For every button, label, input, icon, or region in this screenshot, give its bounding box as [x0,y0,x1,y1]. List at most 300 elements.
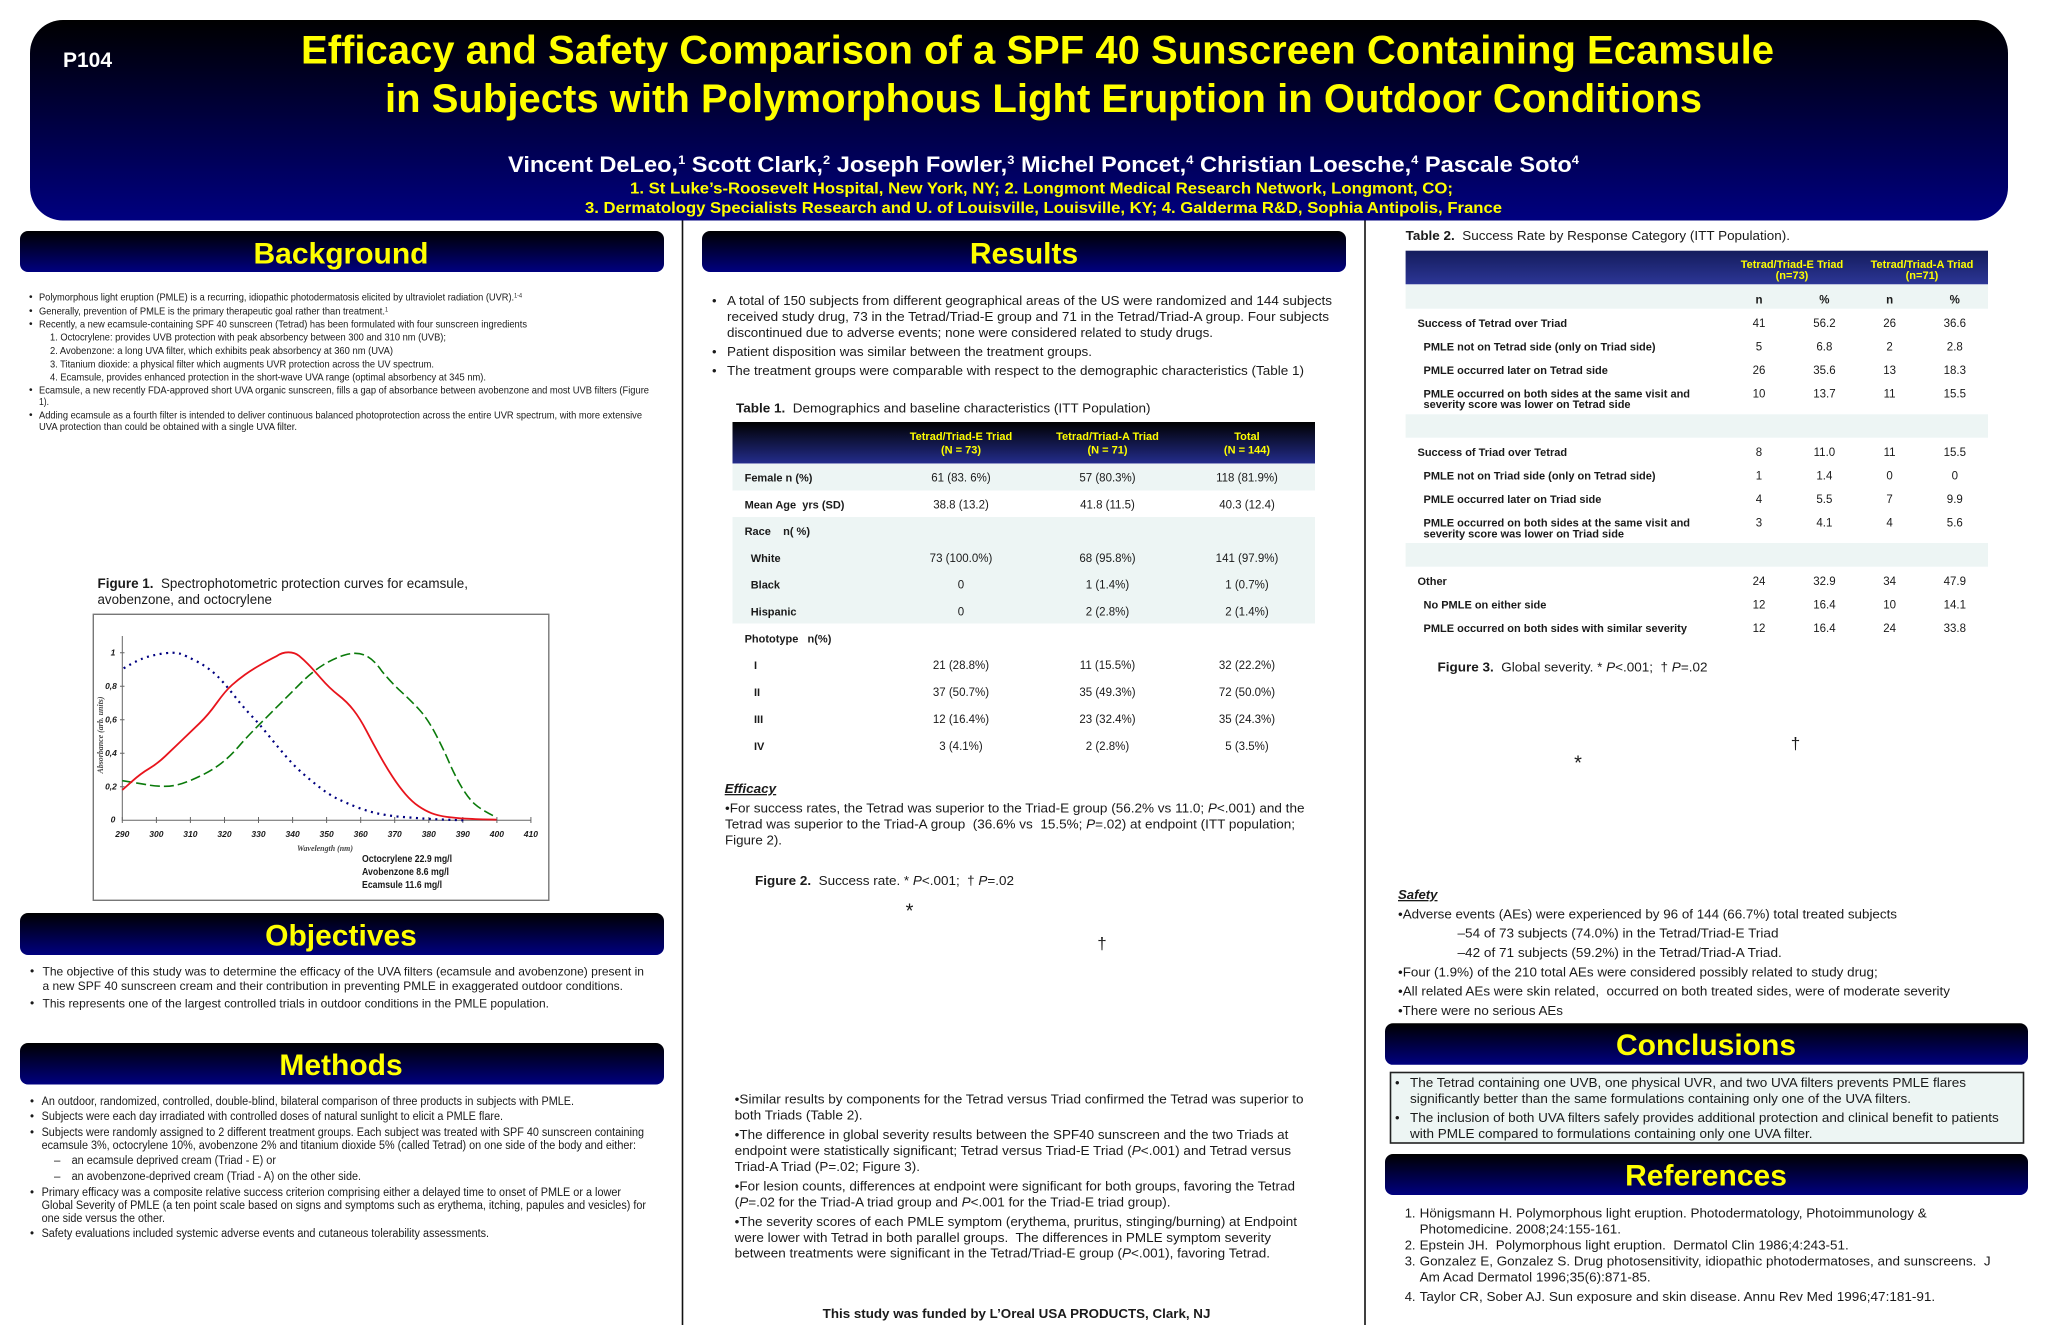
authors: Michel Poncet, [1014,152,1186,177]
title banner [30,20,2008,220]
table 1 header: (N = 71) [1087,444,1128,456]
row: success of triad over tetrad [1418,447,1966,459]
row: phototype III: 23 (32.4%) [1079,714,1136,726]
methods text: – [54,1155,61,1167]
row: similar severity: PMLE occurred on both sides with similar severity [1424,623,1688,635]
efficacy text: Tetrad was superior to the Triad-A group (36.6% vs 15.5%; P=.02) at endpoint (ITT population; [725,816,1295,832]
background text: 1). [39,397,49,408]
background text: 4. Ecamsule, provides enhanced protection in the short-wave UVA range (optimal absorbency at 345 nm). [50,372,486,384]
row: PMLE not on Tetrad side: 2.8 [1947,342,1963,354]
poster number: P104 [63,49,112,72]
methods text: – [54,1171,61,1183]
row band: n and % [1406,285,1988,309]
row: black: Black [751,580,781,592]
chart legend: Ecamsule 11.6 mg/l [362,879,442,891]
row: PMLE both sides, lower on Tetrad: PMLE occurred on both sides at the same visit and [1424,388,1690,400]
panel: results [702,231,1346,1321]
row: black [751,580,1269,592]
row: phototype IV: 5 (3.5%) [1225,741,1269,753]
authors: 2 [823,153,830,167]
row: column units: % [1950,294,1960,306]
row: no PMLE: 12 [1753,600,1765,612]
figure 3 caption: Figure 3. Global severity. * P<.001; † P=.02 [1438,660,1708,674]
figure 2 significance marker: dagger: † [1097,934,1107,953]
conclusions box: The inclusion of both UVA filters safely provides additional protection and clinical benefit to patients [1410,1110,1999,1125]
row: PMLE not on Triad side: PMLE not on Triad side (only on Tetrad side) [1424,470,1656,482]
reference list: 3. [1405,1254,1416,1268]
row: PMLE not on Tetrad side: 6.8 [1816,342,1832,354]
row: phototype III: 35 (24.3%) [1219,714,1275,726]
safety text: •Adverse events (AEs) were experienced by 96 of 144 (66.7%) total treated subjects [1398,906,1898,922]
row: black: 1 (1.4%) [1086,580,1129,592]
heading: background: Background [253,238,429,270]
background text: Recently, a new ecamsule-containing SPF 40 sunscreen (Tetrad) has been formulated with four sunscreen ingredients [39,320,527,330]
row: other: 32.9 [1813,576,1836,588]
authors: Scott Clark, [685,152,823,177]
reference list: Am Acad Dermatol 1996;35(6):871-85. [1420,1270,1651,1284]
background text: 1 [385,308,389,314]
figure 3 significance marker: dagger: † [1791,734,1800,753]
background text: • [29,292,33,303]
safety text [1398,887,1951,1018]
conclusions box [1390,1072,2024,1143]
row: PMLE later on Tetrad side: PMLE occurred later on Tetrad side [1424,365,1608,377]
row: success of tetrad over triad: 41 [1753,318,1765,330]
row: success of tetrad over triad: Success of Tetrad over Triad [1418,318,1567,330]
reference list: Gonzalez E, Gonzalez S. Drug photosensitivity, idiopathic photodermatoses, and sunscreens. J [1420,1254,1991,1268]
table 1 header [732,422,1315,464]
objectives text: This represents one of the largest controlled trials in outdoor conditions in the PMLE population. [42,996,549,1010]
row: PMLE both sides, lower on Triad [1424,518,1963,540]
x axis labels: 410 [523,829,538,839]
background text: 3. Titanium dioxide: a physical filter which augments UVR protection across the UV spectrum. [50,360,434,370]
results body text: •The severity scores of each PMLE symptom (erythema, pruritus, stinging/burning) at Endpoint [735,1214,1297,1229]
row: mean age: Mean Age yrs (SD) [745,500,845,512]
affiliations: 3. Dermatology Specialists Research and U. of Louisville, Louisville, KY; 4. Galderma R&D, Sophia Antipolis, France [585,200,1502,217]
row: PMLE later on Triad side: PMLE occurred later on Triad side [1424,494,1601,506]
banner background [30,20,2008,220]
row: phototype IV: IV [754,741,765,753]
row: no PMLE: 16.4 [1813,600,1836,612]
row: mean age: 40.3 (12.4) [1219,500,1275,512]
reference list: 4. [1405,1289,1416,1304]
background text: • [29,306,33,317]
row: success of tetrad over triad: 36.6 [1944,318,1966,330]
row: PMLE later on Triad side: 7 [1886,494,1893,506]
figure 1 line chart [93,614,549,900]
row: PMLE later on Tetrad side [1424,365,1966,377]
row: PMLE both sides, lower on Tetrad [1424,388,1966,411]
background text: Ecamsule, a new recently FDA-approved short UVA organic sunscreen, fills a gap of absorbance between avobenzone and most UVB filters (Figure [39,386,649,396]
row: PMLE both sides, lower on Triad: 4 [1886,518,1893,530]
row: mean age [745,500,1275,512]
row: success of tetrad over triad: 56.2 [1813,318,1836,330]
methods text: Subjects were each day irradiated with controlled doses of natural sunlight to elicit a PMLE flare. [42,1111,503,1123]
reference list: Taylor CR, Sober AJ. Sun exposure and skin disease. Annu Rev Med 1996;47:181-91. [1420,1289,1935,1304]
row: success of triad over tetrad: Success of Triad over Tetrad [1418,447,1567,459]
row: PMLE later on Triad side [1424,494,1963,506]
table 1 [732,422,1315,753]
heading: references: References [1625,1160,1787,1192]
y axis labels: 0,2 [105,782,117,792]
methods text: • [30,1187,34,1199]
row: column units: n [1755,294,1763,306]
objectives text: • [30,964,34,978]
row band: spacer 1 [1406,414,1988,438]
x axis labels: 380 [422,829,436,839]
background text: • [29,410,33,421]
row: PMLE both sides, lower on Tetrad: 10 [1753,388,1765,400]
methods text: Global Severity of PMLE (a ten point scale based on signs and symptoms such as erythema, itching, papules and vesicles) for [42,1200,646,1212]
table 2 header: (n=73) [1776,270,1809,282]
efficacy text: •For success rates, the Tetrad was superior to the Triad-E group (56.2% vs 11.0; P<.001) and the [725,800,1304,816]
subheading: safety: Safety [1398,887,1438,902]
table 2 [1406,251,1988,635]
row: column units: n [1886,294,1893,306]
row: black: 0 [958,580,964,592]
heading: objectives: Objectives [265,920,417,952]
background text: • [29,319,33,330]
row: column units: % [1819,294,1830,306]
row: PMLE not on Tetrad side: 2 [1886,342,1893,354]
panel: background [20,231,664,900]
row: phototype II: 37 (50.7%) [933,687,989,699]
row: PMLE later on Tetrad side: 13 [1883,365,1896,377]
methods text: ecamsule 3%, octocrylene 10%, avobenzone 2% and titanium dioxide 5% (called Tetrad) on one side of the body and either: [42,1140,636,1152]
row: white: 141 (97.9%) [1216,553,1278,565]
axis title: wavelength: Wavelength (nm) [297,843,353,853]
x axis labels: 310 [183,829,198,839]
methods text: • [30,1111,34,1123]
table 1 header: Total [1234,431,1260,443]
row: white [751,553,1278,565]
results body text [734,1092,1304,1260]
heading: results: Results [970,238,1078,270]
row: female: 61 (83. 6%) [931,472,991,484]
chart legend [362,853,452,891]
subheading: efficacy: Efficacy [725,781,777,796]
row: PMLE both sides, lower on Triad: 5.6 [1947,518,1963,530]
axes and ticks [120,636,531,823]
reference list: 2. [1405,1238,1416,1252]
row: no PMLE: No PMLE on either side [1424,600,1546,612]
objectives text: • [30,996,34,1010]
table 2 header [1406,251,1988,284]
methods text: an ecamsule deprived cream (Triad - E) or [72,1155,276,1167]
table 1 header: Tetrad/Triad-E Triad [910,431,1012,443]
results summary text: The treatment groups were comparable with respect to the demographic characteristics (Table 1) [727,363,1304,378]
row: hispanic [751,606,1269,618]
x axis labels: 320 [217,829,232,839]
row: phototype: Phototype n(%) [745,634,832,646]
results body text: endpoint were statistically significant; Tetrad versus Triad-E Triad ( P<.001) and Tetrad versus [735,1143,1292,1158]
conclusions box: • [1395,1110,1400,1125]
row: PMLE both sides, lower on Triad: 4.1 [1816,518,1832,530]
row: phototype IV [754,741,1269,753]
results body text: (P=.02 for the Triad-A triad group and P<.001 for the Triad-E triad group). [735,1194,1170,1210]
row: PMLE not on Tetrad side: PMLE not on Tetrad side (only on Triad side) [1424,342,1656,354]
background text: Adding ecamsule as a fourth filter is intended to deliver continuous balanced photoprotection across the entire UVR spectrum, with more extensive [39,410,642,422]
results body text: •For lesion counts, differences at endpoint were significant for both groups, favoring the Tetrad [735,1178,1295,1194]
figure 1 caption: avobenzone, and octocrylene [98,592,272,607]
reference list: Hönigsmann H. Polymorphous light eruption. Photodermatology, Photoimmunology & [1420,1206,1927,1220]
x axis labels [114,829,538,839]
row: phototype I: 32 (22.2%) [1219,660,1275,672]
results body text: Triad-A Triad (P=.02; Figure 3). [735,1159,920,1174]
table 1 header: Tetrad/Triad-A Triad [1056,431,1159,443]
heading: conclusions: Conclusions [1616,1029,1796,1062]
curve: octocrylene (blue dotted) [124,653,464,820]
row: success of triad over tetrad: 15.5 [1944,447,1966,459]
row: phototype I: 11 (15.5%) [1080,660,1135,672]
row: success of triad over tetrad: 11.0 [1814,447,1835,459]
row: similar severity: 24 [1883,623,1897,635]
reference list [1405,1206,1991,1304]
title: in Subjects with Polymorphous Light Eruption in Outdoor Conditions [385,77,1702,121]
figure 1 caption: Figure 1. Spectrophotometric protection curves for ecamsule, [98,576,468,591]
background text: 1-4 [514,294,523,300]
objectives text [30,964,644,1010]
table 1 header: (N = 144) [1224,444,1270,456]
methods text: • [30,1228,34,1240]
row: PMLE later on Triad side: 9.9 [1947,494,1963,506]
methods text: • [30,1127,34,1139]
methods text: an avobenzone-deprived cream (Triad - A) on the other side. [72,1171,361,1183]
authors: Joseph Fowler, [830,152,1007,177]
x axis labels: 360 [354,829,368,839]
curves [122,652,497,820]
panel: objectives [20,913,664,1010]
authors: Pascale Soto [1418,152,1572,177]
row: PMLE not on Triad side: 1.4 [1816,470,1833,482]
methods text: one side versus the other. [42,1213,165,1225]
safety text: –42 of 71 subjects (59.2%) in the Tetrad/Triad-A Triad. [1458,945,1782,960]
table 1 caption: Table 1. Demographics and baseline characteristics (ITT Population) [736,400,1150,416]
row: similar severity: 16.4 [1813,623,1836,635]
figure 1 caption [98,576,468,607]
background text: UVA protection than could be obtained with a single UVA filter. [39,422,297,433]
row: phototype IV: 2 (2.8%) [1086,741,1129,753]
row: hispanic: 0 [958,606,964,618]
row: PMLE not on Triad side [1424,470,1958,482]
row: phototype I: 21 (28.8%) [933,660,989,672]
results summary text [712,293,1333,378]
row: PMLE not on Tetrad side [1424,342,1963,354]
chart legend: Octocrylene 22.9 mg/l [362,853,452,865]
y axis labels: 1 [111,648,116,658]
safety text: •Four (1.9%) of the 210 total AEs were considered possibly related to study drug; [1398,964,1878,980]
results body text: •The difference in global severity results between the SPF40 sunscreen and the two Triads at [735,1127,1289,1142]
efficacy text [725,781,1304,848]
authors: 1 [678,153,686,167]
axis title: absorbance: Absorbance (arb. units) [95,696,105,774]
curve: ecamsule (red solid) [122,652,497,820]
row: female [745,472,1278,484]
methods text: Safety evaluations included systemic adverse events and cutaneous tolerability assessments. [42,1228,489,1240]
row: phototype II: 35 (49.3%) [1079,687,1136,699]
y axis labels [105,648,117,824]
figure 3 significance marker: asterisk: * [1574,752,1582,774]
background text: • [29,385,33,396]
row: PMLE both sides, lower on Tetrad: 11 [1884,388,1896,400]
x axis labels: 330 [251,829,266,839]
row: phototype II [754,687,1275,699]
heading: methods [20,1043,664,1084]
results summary text: • [712,344,717,359]
objectives text: a new SPF 40 sunscreen cream and their contribution in preventing PMLE in exaggerated outdoor conditions. [42,979,623,993]
results summary text: A total of 150 subjects from different geographical areas of the US were randomized and 144 subjects [727,293,1333,308]
row: PMLE not on Tetrad side: 5 [1756,342,1762,354]
row: phototype II: 72 (50.0%) [1219,687,1275,699]
row: PMLE both sides, lower on Triad: PMLE occurred on both sides at the same visit and [1424,518,1690,530]
conclusions box: • [1395,1075,1400,1090]
row: PMLE later on Tetrad side: 35.6 [1813,365,1836,377]
curve: avobenzone (green dashed) [122,653,497,817]
authors: Christian Loesche, [1193,152,1411,177]
row: other [1418,576,1966,588]
panel: table 2 and safety [1398,228,1988,1018]
row: female: Female n (%) [745,472,813,484]
row: hispanic: 2 (1.4%) [1225,606,1269,618]
row: PMLE both sides, lower on Triad: severity score was lower on Triad side [1424,528,1624,540]
row: PMLE later on Triad side: 5.5 [1816,494,1832,506]
conclusions box: significantly better than the same formulations containing only one of the UVA filters. [1410,1091,1911,1106]
x axis labels: 370 [388,829,402,839]
row: hispanic: Hispanic [751,606,797,618]
row: success of tetrad over triad [1418,318,1966,330]
y axis labels: 0,4 [105,748,117,758]
affiliations [585,180,1502,217]
affiliations: 1. St Luke’s-Roosevelt Hospital, New York, NY; 2. Longmont Medical Research Network, Longmont, CO; [630,180,1453,198]
row: PMLE both sides, lower on Tetrad: 13.7 [1813,388,1836,400]
row: other: Other [1418,576,1448,588]
row: PMLE not on Triad side: 0 [1952,470,1958,482]
row: phototype IV: 3 (4.1%) [939,741,983,753]
row: hispanic: 2 (2.8%) [1086,606,1129,618]
row: PMLE both sides, lower on Triad: 3 [1756,518,1762,530]
results summary text: received study drug, 73 in the Tetrad/Triad-E group and 71 in the Tetrad/Triad-A group. Four subjects [727,309,1330,324]
background text: 2. Avobenzone: a long UVA filter, which exhibits peak absorbency at 360 nm (UVA) [50,346,393,357]
row: black: 1 (0.7%) [1225,580,1269,592]
table 2 caption: Table 2. Success Rate by Response Category (ITT Population). [1406,228,1790,243]
row: success of triad over tetrad: 11 [1884,447,1896,459]
heading: results [702,231,1346,272]
reference list: Photomedicine. 2008;24:155-161. [1420,1222,1621,1236]
x axis labels: 340 [286,829,300,839]
row: no PMLE [1424,600,1966,612]
authors: 3 [1007,153,1015,167]
conclusions box: with PMLE compared to formulations containing only one UVA filter. [1409,1126,1812,1141]
row band: female [732,464,1315,490]
table 2 header: Tetrad/Triad-E Triad [1741,259,1843,271]
methods text [30,1096,646,1240]
row: PMLE not on Triad side: 1 [1756,470,1762,482]
row band: race [732,517,1315,624]
row: phototype III [754,714,1275,726]
background text: Polymorphous light eruption (PMLE) is a recurring, idiopathic photodermatosis elicited by ultraviolet radiation (UVR). [39,292,562,304]
row: female: 118 (81.9%) [1216,472,1278,484]
background text: 1. Octocrylene: provides UVB protection with peak absorbency between 300 and 310 nm (UVB); [50,332,446,344]
y axis labels: 0,8 [105,681,117,691]
panel: conclusions [1385,1023,2028,1143]
y axis labels: 0 [111,814,116,824]
methods text: • [30,1096,34,1108]
heading: objectives [20,913,664,955]
row: white: 73 (100.0%) [930,553,992,565]
authors: Vincent DeLeo, [508,152,667,177]
column divider: right [1364,220,1366,1325]
heading: references [1385,1154,2028,1195]
table 2 header: (n=71) [1906,270,1939,282]
row: phototype I [754,660,1275,672]
results body text: between treatments were significant in the Tetrad/Triad-E group ( P<.001), favoring Tetrad. [735,1246,1270,1260]
row: no PMLE: 10 [1883,600,1896,612]
row: mean age: 41.8 (11.5) [1080,500,1135,512]
safety text: •There were no serious AEs [1398,1003,1564,1018]
row: other: 34 [1883,576,1897,588]
results summary text: discontinued due to adverse events; none were considered related to study drugs. [727,325,1213,340]
safety text: –54 of 73 subjects (74.0%) in the Tetrad/Triad-E Triad [1458,926,1778,940]
methods text: An outdoor, randomized, controlled, double-blind, bilateral comparison of three products in subjects with PMLE. [42,1096,574,1108]
chart legend: Avobenzone 8.6 mg/l [362,866,449,878]
authors: 4 [1186,153,1194,167]
methods text: Primary efficacy was a composite relative success criterion comprising either a delayed time to onset of PMLE or a lower [42,1187,621,1199]
row: female: 57 (80.3%) [1079,472,1136,484]
reference list: Epstein JH. Polymorphous light eruption. Dermatol Clin 1986;4:243-51. [1420,1238,1849,1252]
table 2 header: Tetrad/Triad-A Triad [1871,259,1973,271]
funding note: This study was funded by L’Oreal USA PRODUCTS, Clark, NJ [823,1306,1210,1321]
x axis labels: 300 [149,829,164,839]
methods text: Subjects were randomly assigned to 2 different treatment groups. Each subject was treated with SPF 40 sunscreen containing [42,1127,644,1139]
column divider: left [682,220,683,1325]
title: Efficacy and Safety Comparison of a SPF 40 Sunscreen Containing Ecamsule [301,28,1774,72]
results summary text: Patient disposition was similar between the treatment groups. [727,344,1092,359]
results body text: were lower with Tetrad in both parallel groups. The differences in PMLE symptom severity [734,1230,1272,1245]
authors: 4 [1572,153,1579,167]
chart frame [93,614,549,900]
row: phototype III: 12 (16.4%) [933,714,989,726]
row: success of tetrad over triad: 26 [1883,318,1896,330]
authors: 4 [1411,153,1419,167]
row: race: Race n( %) [745,526,810,538]
row: similar severity [1424,623,1966,635]
figure 2 caption: Figure 2. Success rate. * P<.001; † P=.02 [755,873,1014,888]
row: success of triad over tetrad: 8 [1756,447,1762,459]
heading: conclusions [1385,1023,2028,1065]
efficacy text: Figure 2). [725,832,782,848]
figure 2 significance marker: asterisk: * [906,900,914,922]
x axis labels: 290 [114,829,130,839]
row: PMLE later on Tetrad side: 26 [1753,365,1765,377]
row: other: 24 [1753,576,1766,588]
row: no PMLE: 14.1 [1944,600,1966,612]
row: column units [1755,294,1960,306]
reference list: 1. [1405,1206,1416,1220]
results body text: •Similar results by components for the Tetrad versus Triad confirmed the Tetrad was superior to [735,1092,1304,1106]
heading: methods: Methods [279,1049,403,1082]
conclusions box: The Tetrad containing one UVB, one physical UVR, and two UVA filters prevents PMLE flares [1410,1075,1967,1090]
x axis labels: 350 [320,829,334,839]
row: phototype I: I [754,660,757,672]
table 1 header: (N = 73) [941,444,981,456]
row: phototype II: II [754,687,760,699]
row: white: White [751,553,781,565]
row: phototype III: III [754,714,763,726]
background text: Generally, prevention of PMLE is the primary therapeutic goal rather than treatment. [39,306,417,318]
row: PMLE later on Tetrad side: 18.3 [1944,365,1966,377]
row: PMLE both sides, lower on Tetrad: 15.5 [1944,388,1966,400]
x axis labels: 400 [489,829,504,839]
